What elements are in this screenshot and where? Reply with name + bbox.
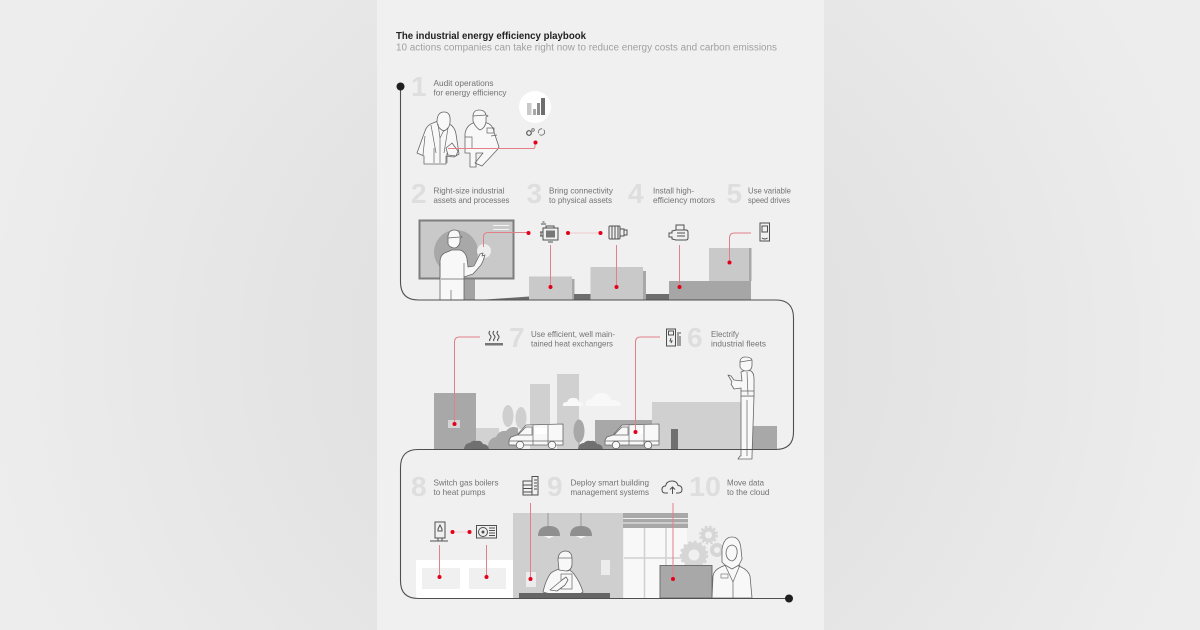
label 5: speed drives [748,195,790,205]
label 10: Move data [727,478,764,488]
title: The industrial energy efficiency playbook [396,31,586,42]
office room [513,513,623,598]
worker with tablet [728,357,754,459]
label 8: Switch gas boilers [434,478,498,488]
label 4: efficiency motors [653,195,715,205]
label 1: for energy efficiency [434,88,507,98]
worker at monitor [440,230,485,300]
label 2: assets and processes [434,195,510,205]
heat pump housing [416,560,513,598]
step 2 [411,178,530,247]
step 5 [726,178,791,264]
connector 5 [728,233,751,264]
scene: step 8 to 10 building [416,513,752,598]
van 2 [605,424,659,449]
label 8: to heat pumps [434,487,486,497]
connector 10 [671,503,675,581]
panel: infographic page [377,0,824,630]
label 3: Bring connectivity [549,186,614,196]
icon: bar chart badge [519,91,551,123]
label 5: Use variable [748,186,791,196]
number 7: 7 [509,322,525,353]
connector 9 [528,503,532,581]
number 1: 1 [411,71,427,102]
icon: motor [609,226,627,239]
label 9: management systems [570,487,649,497]
step 3 [526,178,627,289]
trees and bushes [464,405,603,449]
connector 3 [548,231,618,289]
label 4: Install high- [653,186,694,196]
laptop board [660,566,712,598]
connector 7 [452,337,480,426]
clouds [563,393,621,406]
subtitle: 10 actions companies can take right now to reduce energy costs and carbon emissions [396,42,777,54]
icon: gas boiler [430,522,448,541]
number 4: 4 [628,178,644,209]
step 6 [630,322,766,436]
step 9 [523,471,649,581]
scene: step 6 and 7 city [434,357,777,459]
step 8 [411,471,498,579]
icon: heat exchanger [485,331,503,346]
number 10: 10 [689,471,721,502]
icon: EV charger [666,329,681,346]
number 8: 8 [411,471,427,502]
label 6: industrial fleets [711,338,766,348]
label 1: Audit operations [434,78,494,88]
label 2: Right-size industrial [434,186,505,196]
label 7: tained heat exchangers [531,338,613,348]
woman worker [465,110,499,167]
man in suit [417,112,459,164]
van 1 [509,424,563,449]
label 3: to physical assets [549,195,612,205]
connector 1 [448,140,538,148]
blocks [478,248,752,300]
icon: cloud upload [662,481,682,494]
gears [681,526,722,568]
connector 6 [630,337,660,436]
step 1 [411,71,551,167]
label 10: to the cloud [727,487,770,497]
step 10 [662,471,770,581]
label 9: Deploy smart building [570,478,649,488]
scene: step 2 to 5 industrial blocks [420,220,752,300]
icon: heat pump unit [476,526,496,538]
number 3: 3 [526,178,542,209]
icon: smart building [523,476,538,495]
window [623,513,688,598]
connector 4 [678,245,682,289]
icon: high efficiency motor [669,225,688,240]
man at desk with tablet [519,551,610,598]
journey path [396,82,794,602]
number 5: 5 [726,178,742,209]
icon: gears and cycle [527,129,545,135]
buildings [434,374,777,449]
step 4 [628,178,715,289]
icon: variable speed drive [760,223,770,241]
label 6: Electrify [711,329,740,339]
label 7: Use efficient, well main- [531,329,615,339]
number 6: 6 [687,322,703,353]
number 2: 2 [411,178,427,209]
connector 2 [484,231,530,247]
woman in lab coat [712,537,752,598]
number 9: 9 [547,471,563,502]
monitor [420,220,514,300]
icon: connected controller [540,222,558,242]
step 7 [452,322,615,426]
connector 8 [438,530,488,579]
